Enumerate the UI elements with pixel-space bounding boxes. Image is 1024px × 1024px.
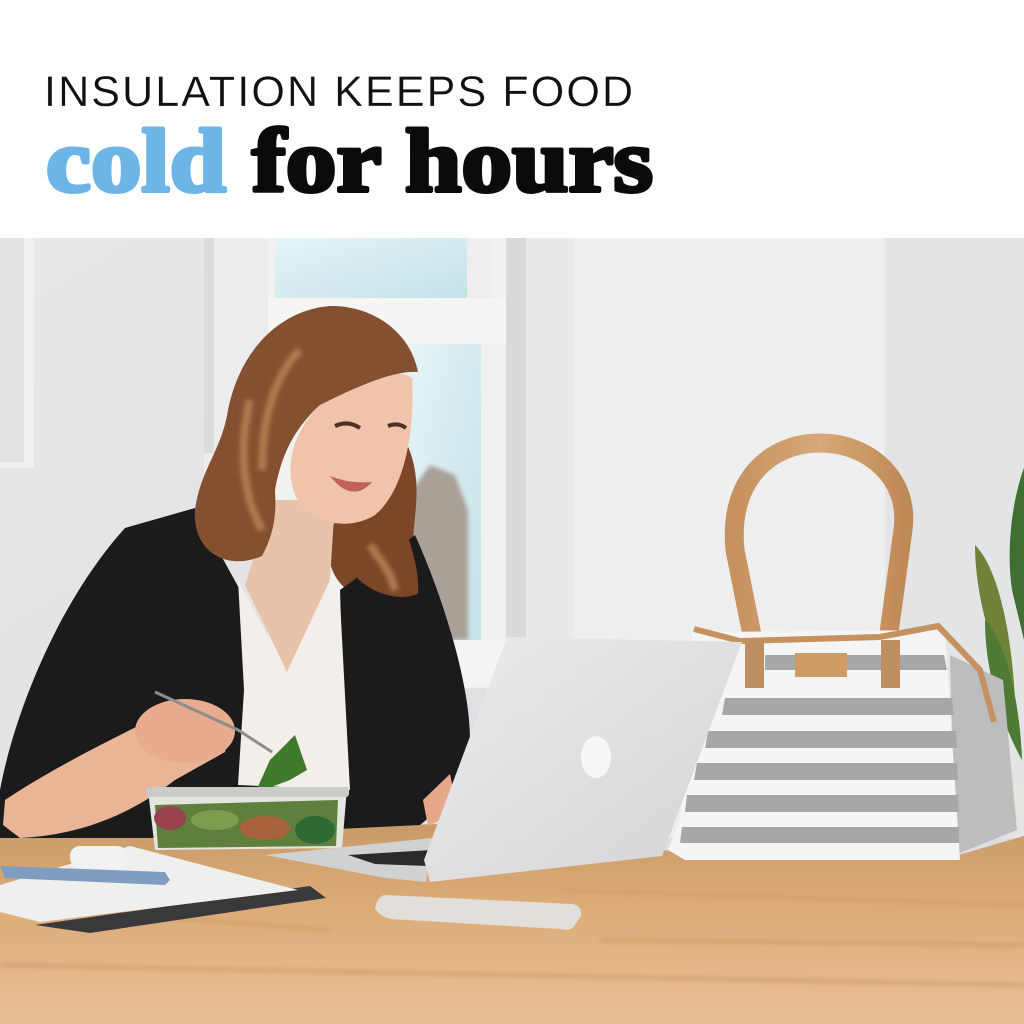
heading: cold for hours xyxy=(46,112,653,211)
handles xyxy=(734,443,904,688)
strap tabs xyxy=(745,640,764,688)
bag body xyxy=(668,630,960,860)
laptop lid xyxy=(424,637,742,882)
face xyxy=(290,374,413,524)
hand xyxy=(135,699,235,763)
other arm xyxy=(423,774,458,826)
window xyxy=(268,238,526,688)
laptop base xyxy=(265,838,432,882)
laptop logo xyxy=(581,736,611,778)
woman xyxy=(0,306,470,838)
plant xyxy=(975,468,1024,835)
heading: cold for hours: for hours xyxy=(252,112,653,211)
photo scene xyxy=(0,238,1024,1024)
notebook xyxy=(0,846,326,933)
heading: insulation keeps food: INSULATION KEEPS FOOD xyxy=(44,68,633,116)
hair highlights xyxy=(244,350,395,590)
fork xyxy=(155,692,272,752)
eyes xyxy=(335,423,406,428)
forearm xyxy=(3,705,232,838)
wall background xyxy=(0,238,1024,858)
bag label xyxy=(795,653,847,677)
blouse xyxy=(238,580,350,790)
table xyxy=(0,824,1024,1024)
hair over blazer right xyxy=(335,525,418,597)
title xyxy=(44,68,653,211)
laptop xyxy=(265,637,742,882)
bag stripes xyxy=(680,655,959,843)
bag trim xyxy=(694,626,994,722)
eraser xyxy=(70,846,127,868)
salad container xyxy=(146,735,349,850)
bag side mesh xyxy=(950,655,1017,855)
pen xyxy=(0,866,170,885)
bag xyxy=(668,443,1017,860)
neck xyxy=(245,500,335,672)
smile xyxy=(330,476,372,492)
blazer xyxy=(0,508,470,838)
back hair xyxy=(329,440,417,600)
heading: cold for hours: cold xyxy=(46,112,226,211)
hair xyxy=(195,306,418,561)
phone xyxy=(375,895,581,930)
